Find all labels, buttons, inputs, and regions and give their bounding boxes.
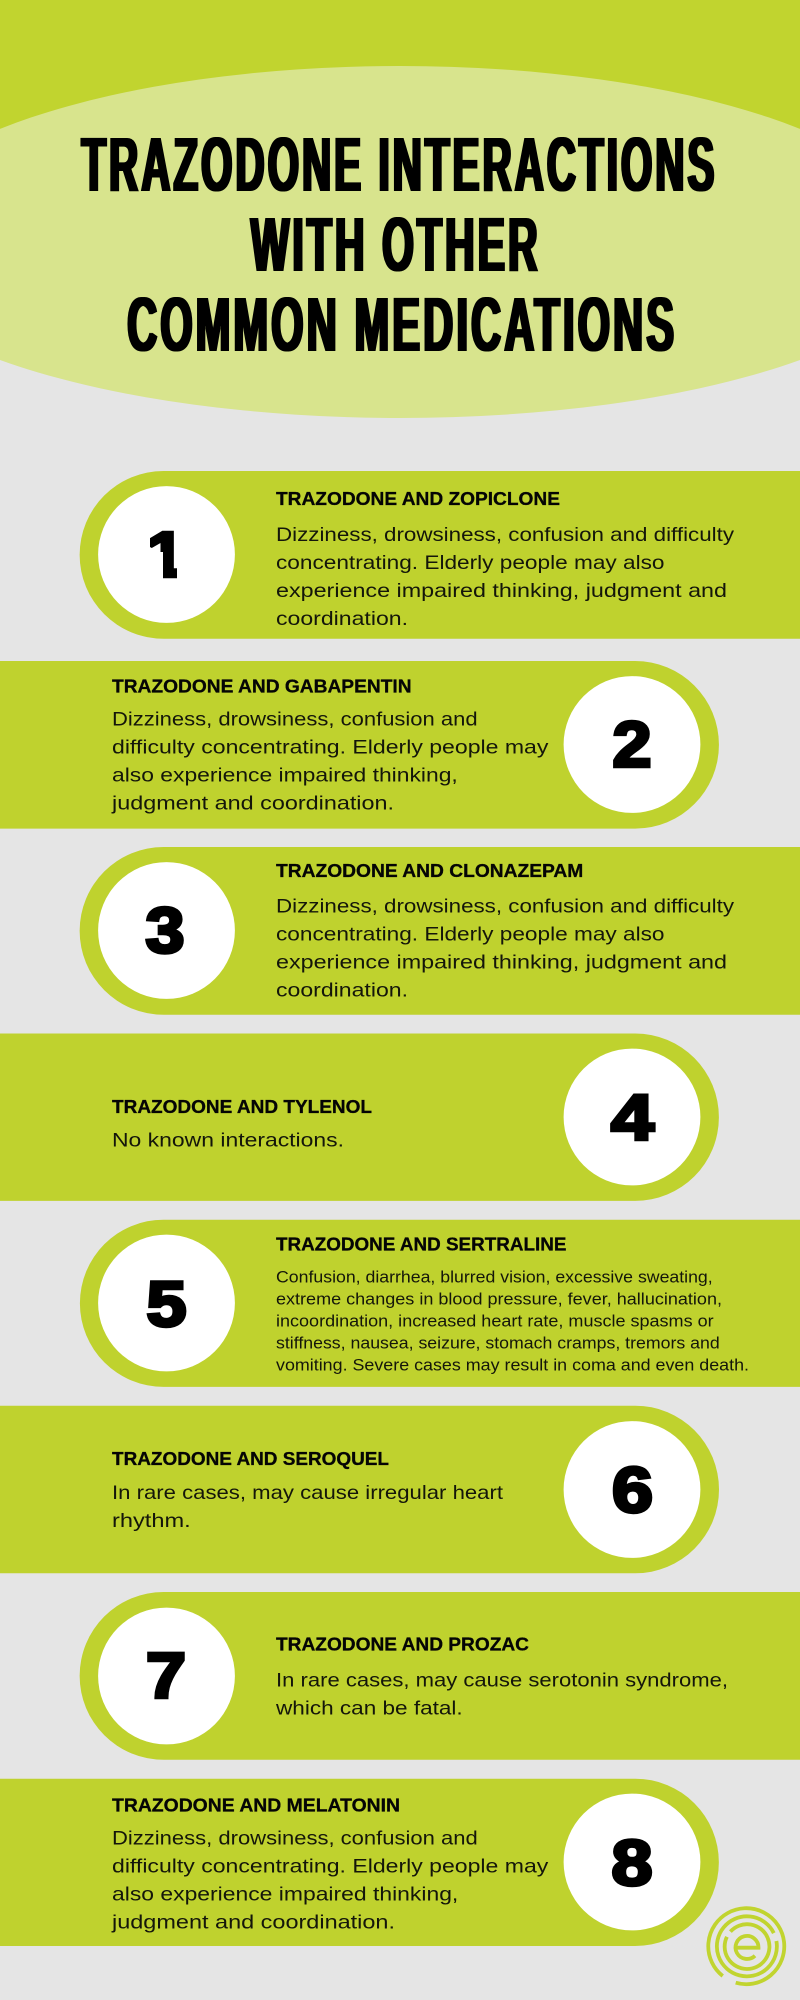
body text: which can be fatal. xyxy=(275,1698,463,1720)
number badge 1: 1 xyxy=(146,518,185,590)
number badge 6 xyxy=(564,1421,700,1558)
body text: coordination. xyxy=(276,608,408,630)
heading: TRAZODONE AND ZOPICLONE xyxy=(276,488,560,509)
number badge 8: 8 xyxy=(612,1827,652,1899)
panel: 5 sertraline xyxy=(80,1220,800,1387)
icon: circular maze logo xyxy=(708,1908,784,1984)
number badge 7 xyxy=(98,1608,235,1744)
panel: 2 gabapentin xyxy=(0,661,719,829)
header band xyxy=(0,0,800,418)
body text: Dizziness, drowsiness, confusion and difficulty xyxy=(276,896,734,918)
number badge 4 xyxy=(564,1049,700,1185)
body text xyxy=(276,524,734,630)
heading: TRAZODONE AND PROZAC xyxy=(276,1633,529,1654)
heading: TRAZODONE AND CLONAZEPAM xyxy=(276,860,583,881)
number badge 3 xyxy=(98,862,235,999)
header ellipse xyxy=(0,66,800,418)
number badge 7: 7 xyxy=(146,1639,186,1711)
panel: 4 tylenol xyxy=(0,1034,719,1201)
body text: rhythm. xyxy=(112,1510,191,1532)
body text xyxy=(275,1670,728,1720)
body text: extreme changes in blood pressure, fever, hallucination, xyxy=(276,1290,722,1308)
body text: difficulty concentrating. Elderly people may xyxy=(112,1856,548,1878)
body text: incoordination, increased heart rate, muscle spasms or xyxy=(276,1312,714,1330)
body text: Dizziness, drowsiness, confusion and xyxy=(112,709,478,731)
panel: 7 prozac xyxy=(80,1592,800,1760)
number badge 1 xyxy=(98,486,235,623)
number badge 2: 2 xyxy=(612,708,652,780)
panel: 1 zopiclone xyxy=(80,471,800,639)
body text xyxy=(276,896,734,1002)
panel: 6 seroquel xyxy=(0,1406,719,1573)
body text: difficulty concentrating. Elderly people may xyxy=(112,737,549,759)
number badge 2 xyxy=(564,676,700,813)
body text: also experience impaired thinking, xyxy=(112,1884,458,1906)
body text: also experience impaired thinking, xyxy=(112,765,458,787)
body text: Dizziness, drowsiness, confusion and difficulty xyxy=(276,524,734,546)
heading: TRAZODONE AND GABAPENTIN xyxy=(112,676,412,697)
number badge 4: 4 xyxy=(611,1081,654,1153)
heading: TRAZODONE AND MELATONIN xyxy=(112,1794,400,1815)
body text: Dizziness, drowsiness, confusion and xyxy=(112,1828,478,1850)
body text: In rare cases, may cause serotonin syndrome, xyxy=(276,1670,728,1692)
number badge 5: 5 xyxy=(146,1268,186,1340)
number badge 8 xyxy=(564,1794,700,1930)
heading: TRAZODONE AND SERTRALINE xyxy=(276,1234,566,1255)
body text: stiffness, nausea, seizure, stomach cramps, tremors and xyxy=(276,1334,720,1352)
body text xyxy=(111,1828,548,1934)
heading: TRAZODONE AND SEROQUEL xyxy=(112,1448,389,1469)
body text: In rare cases, may cause irregular heart xyxy=(112,1482,504,1504)
number badge 5 xyxy=(98,1235,235,1371)
body text: judgment and coordination. xyxy=(111,1912,395,1934)
body text: No known interactions. xyxy=(112,1129,344,1151)
body text xyxy=(112,1482,504,1532)
heading: TRAZODONE AND TYLENOL xyxy=(112,1096,372,1117)
panel: 8 melatonin xyxy=(0,1779,719,1946)
body text xyxy=(276,1268,749,1374)
panel: 3 clonazepam xyxy=(80,847,800,1015)
body text: experience impaired thinking, judgment and xyxy=(276,952,727,974)
number badge 3: 3 xyxy=(146,894,184,966)
number badge 6: 6 xyxy=(612,1454,653,1526)
body text: experience impaired thinking, judgment and xyxy=(276,580,727,602)
body text: concentrating. Elderly people may also xyxy=(276,552,664,574)
title xyxy=(82,122,718,368)
body text: concentrating. Elderly people may also xyxy=(276,924,664,946)
body text: Confusion, diarrhea, blurred vision, excessive sweating, xyxy=(276,1268,713,1286)
body text xyxy=(111,709,549,815)
body text: coordination. xyxy=(276,980,408,1002)
body text: judgment and coordination. xyxy=(111,793,394,815)
title: WITH OTHER xyxy=(251,202,541,288)
body text: vomiting. Severe cases may result in coma and even death. xyxy=(276,1356,749,1374)
